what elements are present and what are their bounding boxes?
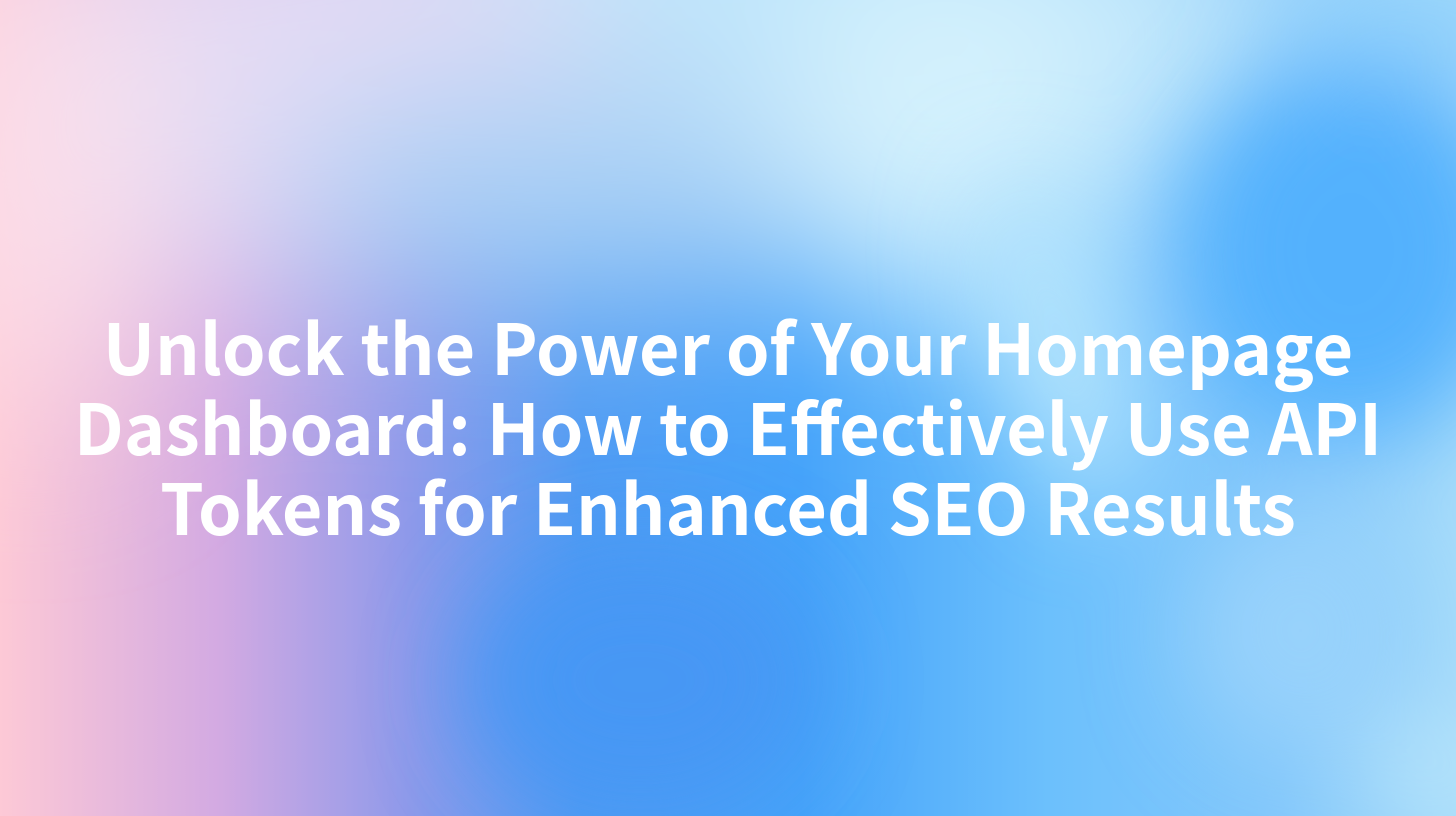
title: Dashboard: How to Effectively Use API (74, 375, 1382, 476)
title (74, 306, 1382, 546)
